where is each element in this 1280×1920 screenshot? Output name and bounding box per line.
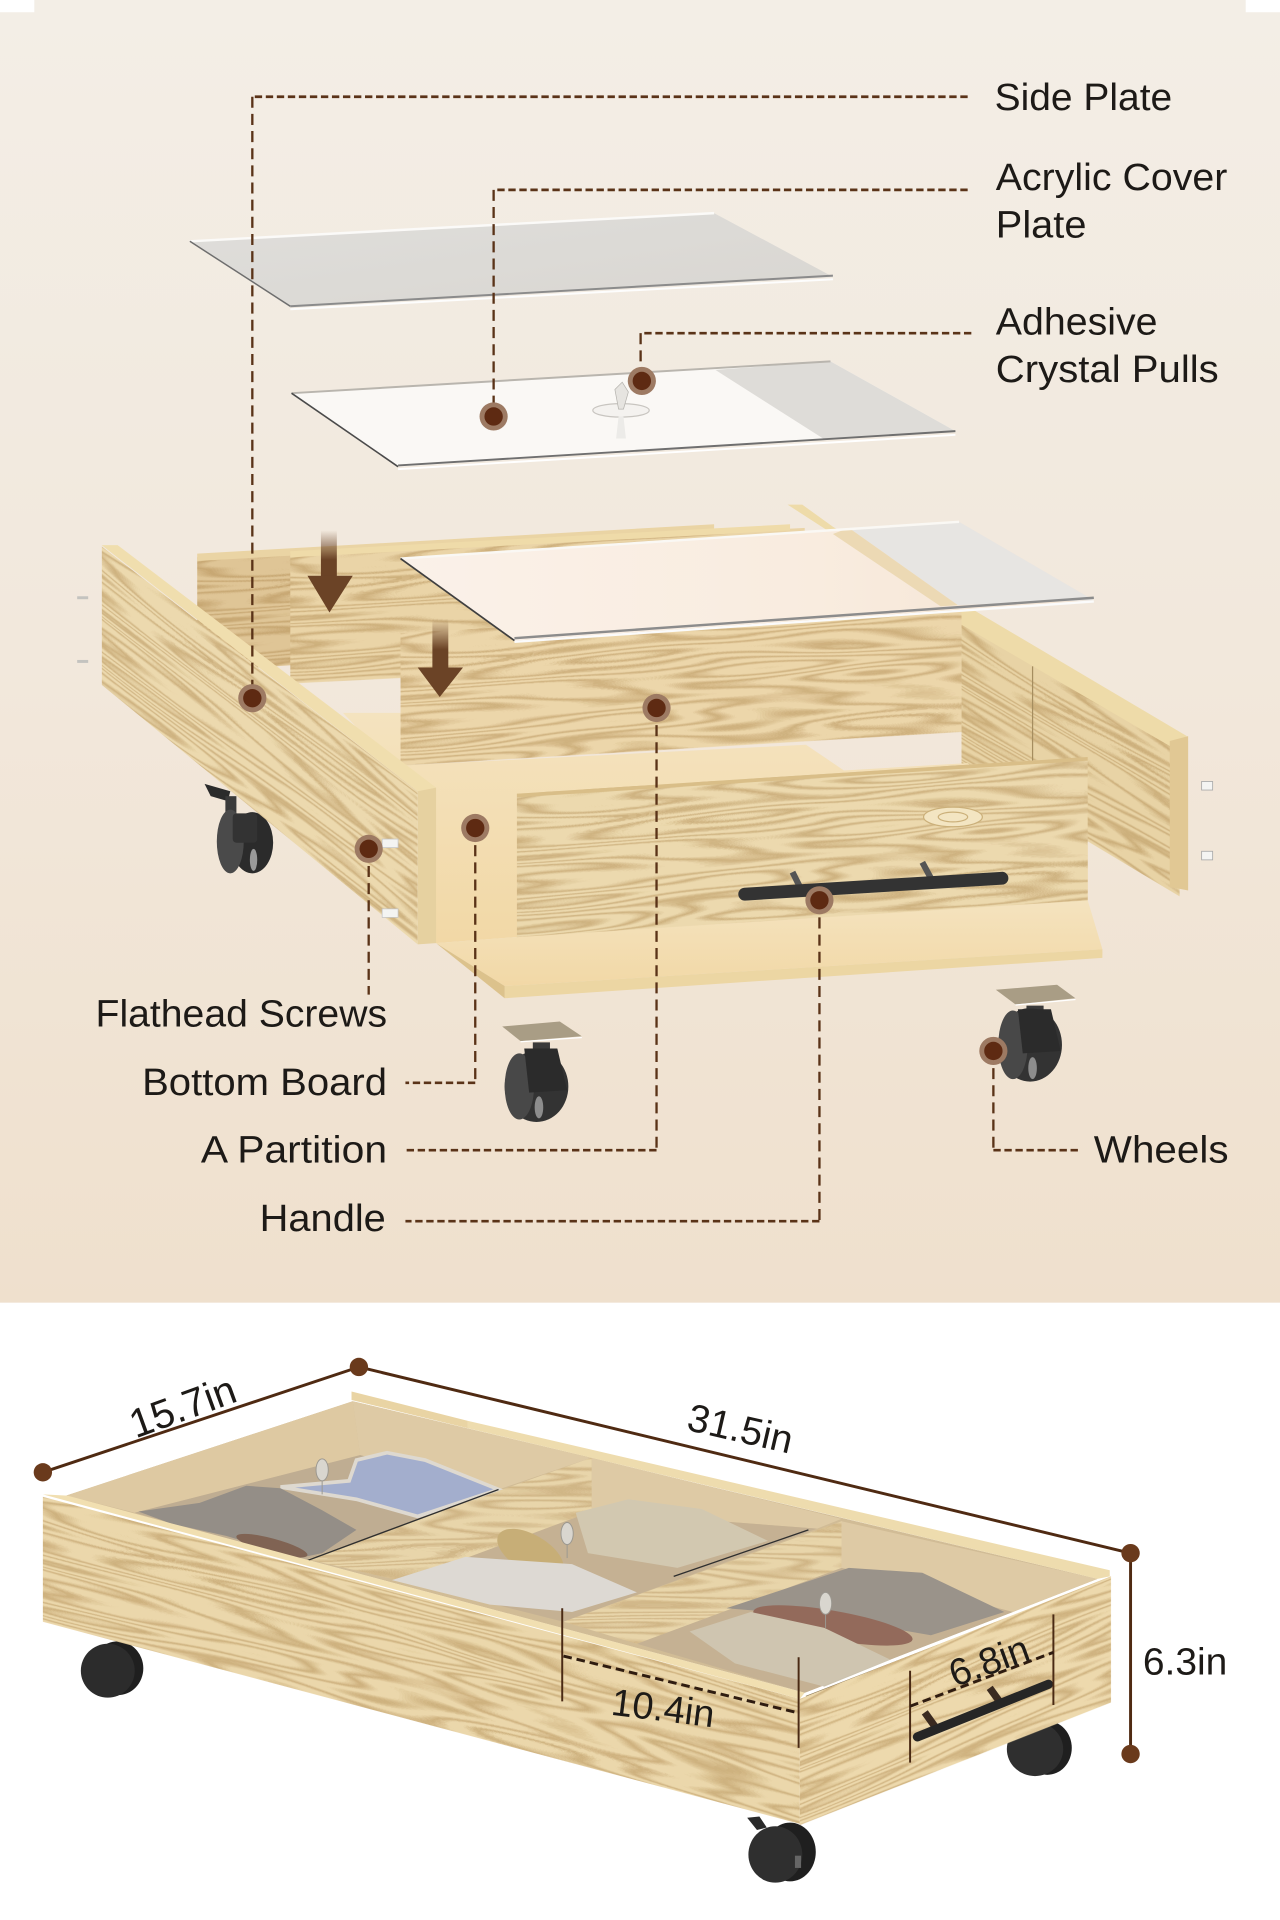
wheel left (81, 1641, 143, 1698)
callout: acrylic cover plate: Plate (996, 205, 1086, 247)
callout: wheels (979, 1037, 1229, 1171)
callout: bottom board: Bottom Board (142, 1062, 387, 1104)
flathead screws (77, 598, 1213, 917)
callout: adhesive crystal pulls (628, 301, 1219, 395)
dimension: length 31.5in (359, 1367, 1131, 1553)
dimension: compartment 10.4in: 10.4in (609, 1682, 717, 1736)
callout: adhesive crystal pulls: Adhesive (996, 301, 1158, 343)
callout: side plate: Side Plate (995, 77, 1172, 119)
arrow: rear partition down (307, 530, 353, 612)
wheel centre (747, 1816, 816, 1883)
crystal knobs (316, 1459, 832, 1628)
partition rear (290, 524, 805, 683)
wheel right (1007, 1721, 1072, 1776)
callout: adhesive crystal pulls: Crystal Pulls (996, 349, 1219, 391)
compartment two (307, 1458, 841, 1622)
callout: a partition (201, 694, 671, 1171)
dimension: width 15.7in (43, 1366, 359, 1472)
callout: bottom board (142, 814, 489, 1104)
arrow: front partition down (418, 619, 463, 697)
bottom board surface (343, 713, 1088, 943)
dimension markers (34, 1358, 1140, 1763)
long front face (43, 1494, 805, 1824)
compartment three (563, 1521, 1097, 1693)
acrylic plate on assembled box (401, 522, 1094, 642)
icon: right wheel (996, 985, 1075, 1082)
callout: flathead screws (96, 835, 387, 1035)
bottom board edge (436, 900, 1102, 998)
box rims (352, 1391, 1110, 1696)
acrylic side plate (190, 213, 833, 309)
callout: handle: Handle (260, 1198, 386, 1240)
partition front (401, 600, 962, 766)
icon: handle (745, 862, 1002, 894)
right side plate (788, 505, 1188, 896)
panel: exploded parts diagram (0, 0, 1280, 1303)
panel: assembled box with dimensions (34, 1358, 1227, 1883)
callout: a partition: A Partition (201, 1129, 387, 1171)
icon: rear left wheel (205, 784, 273, 873)
compartment one (66, 1401, 592, 1562)
dimension: length 31.5in: 31.5in (683, 1397, 797, 1462)
icon: front wheel (502, 1022, 582, 1122)
left side plate (102, 545, 436, 946)
callout: side plate (238, 77, 1172, 712)
wheels under box (81, 1641, 1072, 1883)
front panel with handle (517, 757, 1088, 937)
callout: wheels: Wheels (1094, 1129, 1229, 1171)
box interior (66, 1401, 1097, 1693)
dimension: compartment 6.8in (910, 1614, 1053, 1763)
callout: acrylic cover plate (480, 157, 1228, 431)
callout: handle (260, 886, 834, 1240)
dimension: width 15.7in: 15.7in (123, 1366, 242, 1447)
callout: flathead screws: Flathead Screws (96, 993, 387, 1035)
dimension: compartment 6.8in: 6.8in (943, 1628, 1035, 1696)
dimension: compartment 10.4in (562, 1608, 799, 1748)
callout: acrylic cover plate: Acrylic Cover (996, 157, 1228, 199)
icon: crystal pull (593, 382, 649, 439)
dimension: height 6.3in: 6.3in (1143, 1641, 1227, 1683)
end face (800, 1576, 1111, 1825)
rear side wall (197, 524, 714, 671)
knot detail (924, 807, 982, 827)
icon: end handle (917, 1684, 1048, 1737)
acrylic cover plate (292, 361, 955, 469)
